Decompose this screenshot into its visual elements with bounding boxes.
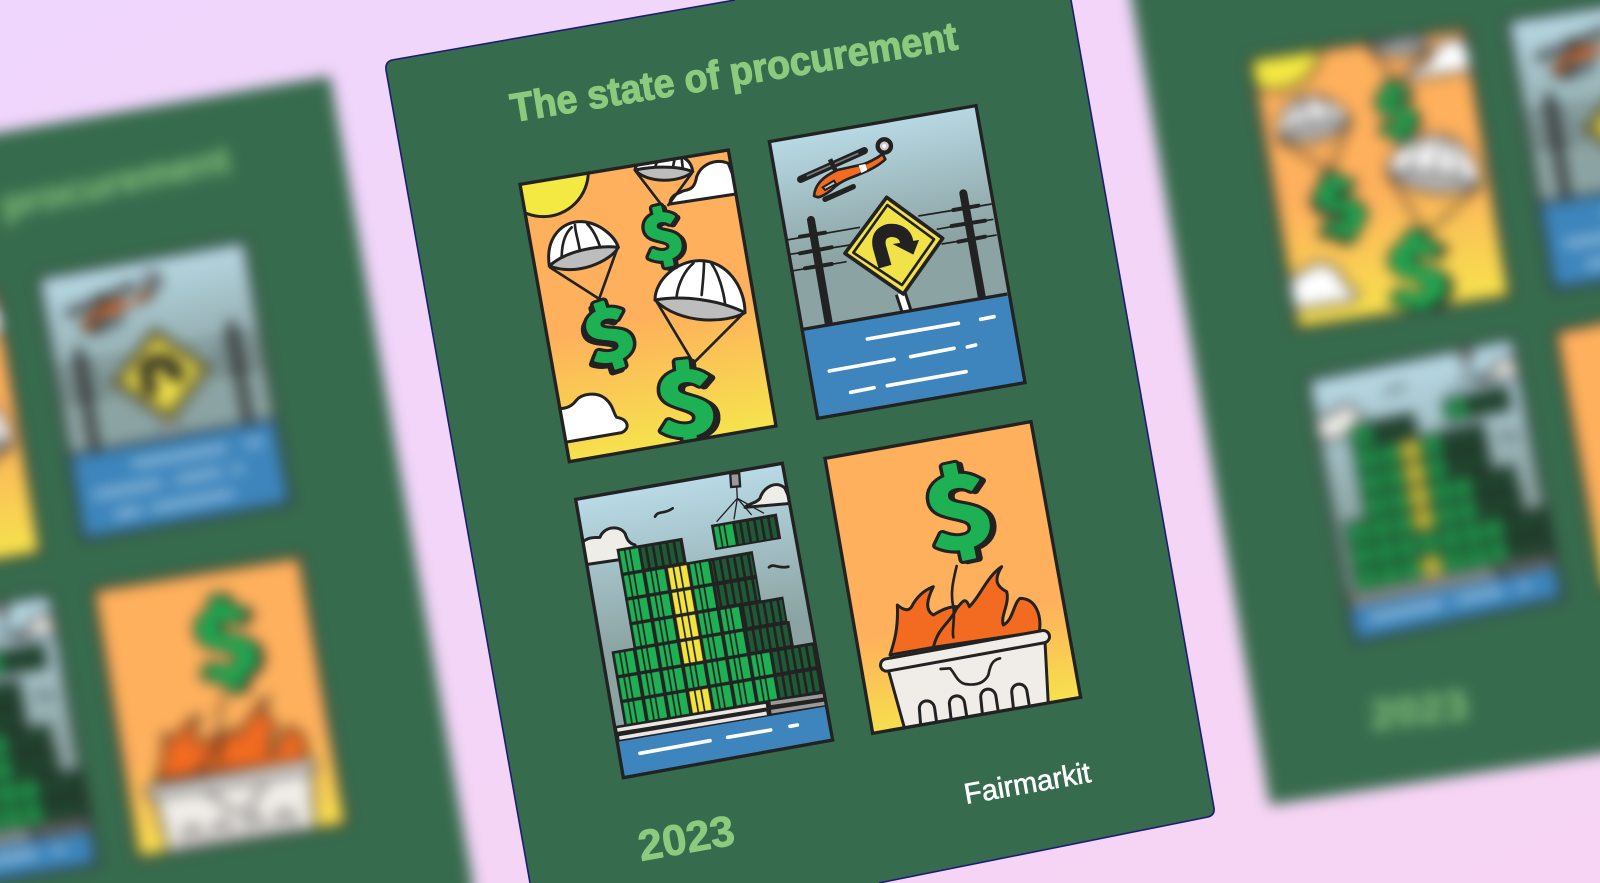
icon: dollar bottom: $ xyxy=(652,333,728,465)
floating container xyxy=(712,515,780,549)
brand logo: Fairmarkit xyxy=(962,757,1093,811)
icon: dollar left: $ xyxy=(569,275,647,386)
year label: 2023 xyxy=(634,807,738,871)
icon: dollar left: $ xyxy=(569,275,647,386)
illustration: helicopter, road sign and flood xyxy=(769,106,1027,420)
cover background xyxy=(386,0,1214,883)
panel: blurred right cover: 2023 xyxy=(1368,683,1470,738)
icon: dollar bottom: $ xyxy=(648,331,724,464)
container stack xyxy=(596,520,823,726)
icon: flames xyxy=(890,567,1040,655)
icon: dollar balloon: $ xyxy=(914,429,1010,583)
panel: blurred left cover xyxy=(0,76,473,883)
icon: helicopter xyxy=(801,139,891,199)
icon: dollar top: $ xyxy=(636,186,694,281)
icon: dollar top: $ xyxy=(633,185,691,280)
panel: blurred right cover xyxy=(1125,0,1600,805)
icon: road sign xyxy=(845,197,943,294)
quay xyxy=(615,692,827,743)
icon: dumpster xyxy=(887,637,1048,730)
icon: dollar balloon: $ xyxy=(909,428,1006,581)
icon: dollar top: $ xyxy=(633,185,691,280)
illustration: parachuting dollars xyxy=(498,127,776,466)
illustration: dollar balloon over dumpster fire xyxy=(825,422,1081,733)
illustration: container stack xyxy=(576,463,837,782)
icon: dollar balloon: $ xyxy=(909,428,1006,581)
icon: dollar bottom: $ xyxy=(648,331,724,464)
title: The state of procurement xyxy=(507,14,961,131)
panel: main report cover xyxy=(386,0,1214,883)
icon: dollar left: $ xyxy=(566,279,644,390)
